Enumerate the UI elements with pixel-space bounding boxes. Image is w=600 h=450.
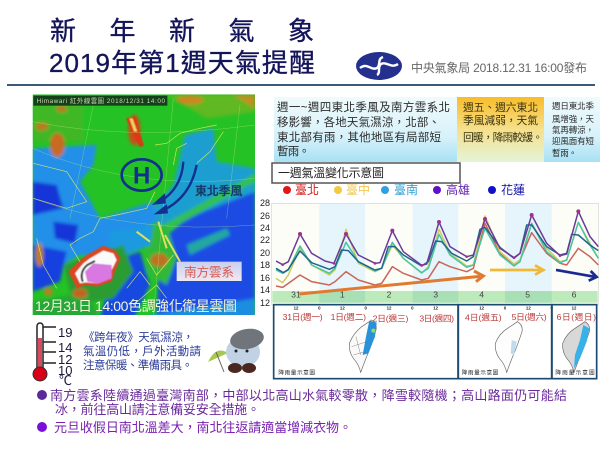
chart legend [283, 182, 525, 197]
arrow: cooling trend [556, 270, 597, 281]
satellite timestamp bar [33, 96, 167, 106]
rainfall panel: Dec 31 to Jan 3: 3日(週四) [419, 313, 454, 323]
rainfall panel: Jan 6 [552, 305, 597, 379]
bullet notes [37, 388, 567, 435]
bullet notes: 元旦收假日南北溫差大，南北往返請適當增減衣物。 [54, 420, 352, 435]
icon: weather bureau logo [356, 52, 402, 80]
y axis labels: 28 [260, 198, 270, 208]
label: southern cloud system [177, 262, 242, 281]
chart legend: 臺北 [295, 182, 319, 197]
thermometer scale: 14 [58, 340, 72, 355]
time axis: 0 [318, 305, 321, 310]
y axis labels: 22 [260, 235, 270, 245]
icon: mascot with umbrella [208, 326, 265, 373]
text panel: Sunday: 風增強，天 [552, 114, 594, 124]
rainfall panel: Jan 4 to Jan 5: 5日(週六) [512, 311, 547, 322]
time axis: 12 [294, 305, 299, 310]
chart legend: 臺中 [346, 182, 370, 197]
rainfall panel: Dec 31 to Jan 3: 2日(週三) [373, 313, 408, 323]
time axis: 12 [479, 305, 485, 310]
rainfall panel: Jan 6: 6日(週日) [557, 312, 596, 322]
time axis: 12 [340, 305, 345, 310]
satellite caption: 12月31日 14:00色調強化衛星雲圖 [35, 298, 237, 314]
text panel: Friday and Saturday [457, 97, 544, 162]
thermometer scale: 19 [58, 325, 72, 340]
temperature line chart [272, 203, 598, 305]
text panel: Monday to Thursday: 暫雨。 [277, 144, 310, 158]
text panel: Sunday [544, 97, 600, 162]
y axis labels: 20 [260, 248, 270, 258]
y axis labels: 12 [260, 298, 270, 308]
rainfall panel: Jan 4 to Jan 5: 降雨量示意圖 [462, 369, 499, 377]
icon: thermometer [33, 323, 56, 381]
new year's eve notice: 氣溫仍低，戶外活動請 [83, 344, 202, 358]
chart title box [272, 163, 460, 183]
text panel: Monday to Thursday: 移影響，各地天氣濕涼，北部、 [277, 115, 440, 129]
thermometer scale: ℃ [59, 373, 72, 388]
yellow-green cloud arrows [137, 222, 180, 262]
time axis: 12 [526, 305, 531, 310]
high pressure H symbol [122, 159, 162, 191]
label: northeast monsoon: 東北季風 [195, 183, 242, 198]
y axis labels: 18 [260, 260, 270, 270]
satellite cloud map [33, 94, 255, 319]
y axis labels [260, 198, 270, 308]
thermometer scale: 10 [58, 363, 72, 378]
title [49, 16, 315, 78]
y axis labels: 14 [260, 285, 270, 295]
chart title box: 一週氣溫變化示意圖 [278, 165, 384, 180]
new year's eve notice: 注意保暖、準備雨具。 [83, 358, 193, 372]
rainfall maps [273, 305, 597, 379]
arrow: warming trend [299, 271, 483, 294]
satellite timestamp bar: Himawari 紅外線雲圖 2018/12/31 14:00 [37, 96, 165, 105]
day band: 6 [572, 289, 577, 299]
text panel: Sunday: 週日東北季 [552, 101, 594, 111]
time axis: 0 [364, 305, 367, 310]
text panel: Sunday: 氣再轉涼， [552, 125, 594, 135]
day band: 2 [387, 289, 392, 299]
text panel: Friday and Saturday: 季風減弱，天氣 [463, 113, 538, 127]
time axis: 0 [550, 305, 553, 310]
text panel: Friday and Saturday: 週五、週六東北 [463, 100, 538, 114]
chart legend: 花蓮 [501, 182, 525, 197]
day band: 5 [525, 289, 530, 299]
new year's eve notice: 《跨年夜》天氣濕涼， [83, 330, 194, 344]
y axis labels: 26 [260, 211, 270, 221]
typhoon-like cloud mass [68, 246, 121, 288]
rainfall panel: Dec 31 to Jan 3: 31日(週一) [283, 312, 323, 322]
rainfall panel: Dec 31 to Jan 3 [274, 305, 458, 379]
text panel: Monday to Thursday: 週一~週四東北季風及南方雲系北 [277, 100, 450, 114]
text panel: Monday to Thursday [274, 97, 457, 162]
rainfall panel: Jan 4 to Jan 5: 4日(週五) [465, 313, 502, 323]
day band [272, 289, 598, 303]
rainfall panel: Jan 6: 降雨量示意圖 [555, 369, 595, 377]
text panel: Friday and Saturday: 回暖，降雨較緩。 [463, 130, 543, 144]
chart legend: 高雄 [446, 182, 470, 197]
title: 2019年第1週天氣提醒 [49, 48, 315, 78]
publisher and date: 中央氣象局 2018.12.31 16:00發布 [411, 60, 587, 75]
day band: 31 [291, 289, 301, 299]
y axis labels: 24 [260, 223, 270, 233]
bullet notes: 冰，前往高山請注意備妥安全措施。 [55, 402, 260, 417]
arrow: stable trend [490, 265, 543, 275]
label: southern cloud system: 南方雲系 [184, 264, 234, 279]
day band: 1 [340, 289, 345, 299]
thermometer scale [58, 325, 72, 388]
new year's eve notice [83, 330, 202, 372]
text panel: Sunday: 暫雨。 [552, 148, 577, 158]
time axis: 12 [572, 305, 577, 310]
rainfall panel: Dec 31 to Jan 3: 1日(週二) [331, 312, 366, 322]
map coastlines [33, 98, 255, 315]
day band: 4 [479, 289, 484, 299]
arrows: northeast monsoon [155, 162, 197, 213]
time axis [294, 305, 577, 310]
time axis: 0 [411, 305, 414, 310]
high pressure H symbol: H [133, 163, 150, 190]
rainfall panel: Dec 31 to Jan 3: 降雨量示意圖 [278, 369, 315, 377]
title: 新 年 新 氣 象 [50, 16, 314, 46]
chart legend: 臺南 [394, 182, 418, 197]
text panel: Sunday: 迎風面有短 [552, 136, 594, 146]
rainfall panel: Jan 4 to Jan 5 [458, 305, 552, 379]
thermometer scale: 12 [58, 352, 72, 367]
y axis labels: 16 [260, 273, 270, 283]
day band: 3 [433, 289, 438, 299]
series lines [276, 209, 598, 287]
time axis: 0 [504, 305, 507, 310]
bullet notes: 南方雲系陸續通過臺灣南部，中部以北高山水氣較零散，降雪較隨機；高山路面仍可能結 [50, 388, 567, 403]
time axis: 12 [387, 305, 392, 310]
time axis: 12 [433, 305, 439, 310]
text panel: Monday to Thursday: 東北部有雨，其他地區有局部短 [277, 130, 442, 144]
